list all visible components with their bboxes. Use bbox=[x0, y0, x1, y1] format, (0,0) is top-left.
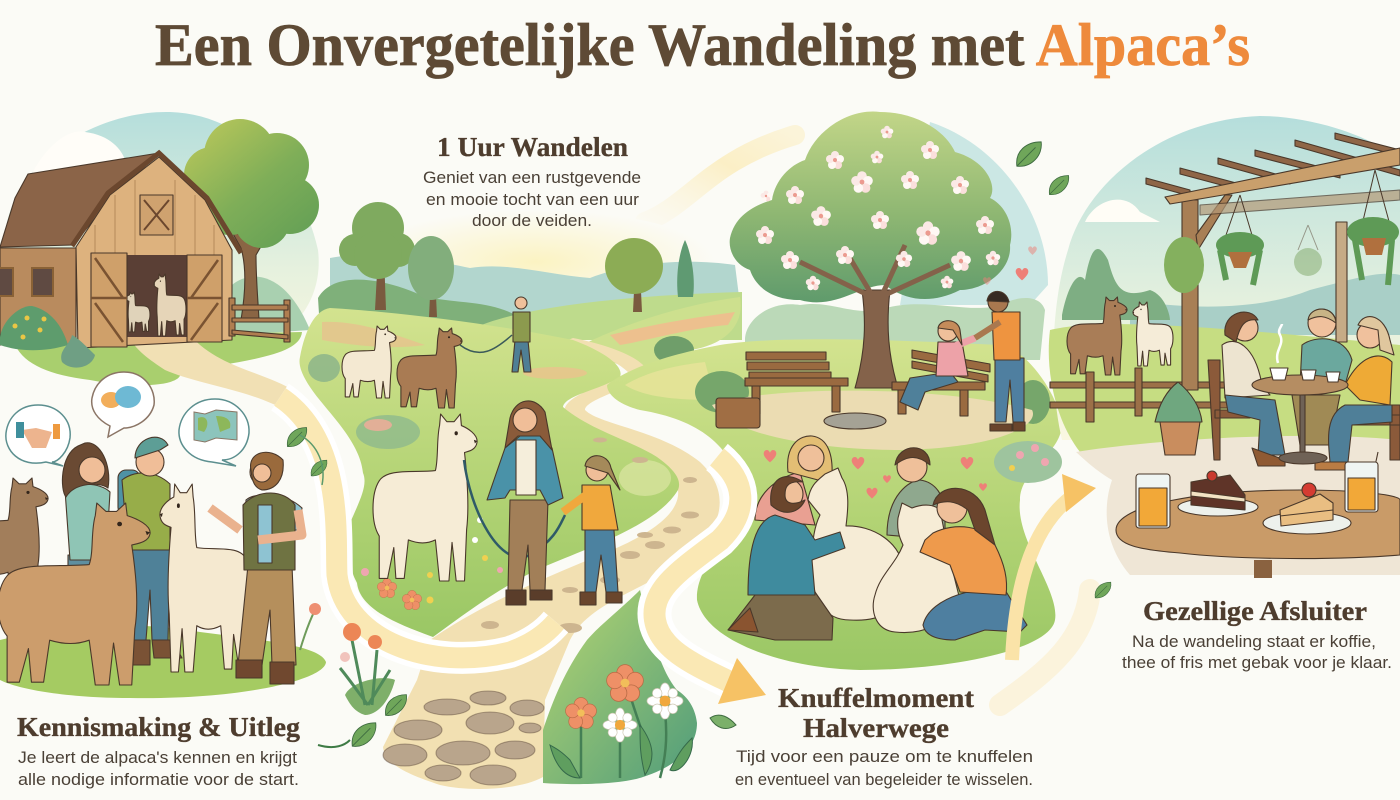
text: step 4: Na de wandeling staat er koffie, bbox=[1132, 632, 1376, 651]
guide with vest bbox=[210, 452, 302, 684]
back man head bbox=[897, 452, 927, 482]
woman head bbox=[937, 493, 967, 523]
speech bubble: handshake bbox=[6, 405, 70, 466]
sky tint bbox=[900, 122, 1048, 305]
heading: step 3: Halverwege bbox=[803, 713, 949, 743]
brown alpaca bbox=[0, 478, 48, 603]
cypress bbox=[677, 240, 694, 297]
hug grass bbox=[607, 339, 1062, 670]
text: step 2: door de veiden. bbox=[472, 211, 592, 230]
distant hills bbox=[1130, 274, 1400, 335]
man beard bbox=[771, 477, 805, 512]
leaf bbox=[1049, 175, 1069, 195]
patio bbox=[1076, 436, 1400, 575]
barn side roof bbox=[0, 153, 159, 247]
cafe table bbox=[1252, 375, 1348, 464]
man head bbox=[773, 479, 803, 509]
hugging group bbox=[728, 436, 1027, 640]
blossoms bbox=[756, 126, 1000, 290]
man boot bbox=[728, 608, 758, 632]
distant brown alpaca bbox=[397, 328, 462, 408]
man in green hoodie bbox=[118, 437, 182, 665]
route band to stone path bbox=[280, 397, 556, 658]
barn loft window bbox=[140, 195, 173, 235]
table leg bbox=[1254, 560, 1272, 578]
speech bubble: map bbox=[179, 399, 249, 466]
wooden fence bbox=[1050, 368, 1230, 422]
grass under barn bbox=[15, 332, 302, 385]
white flower plant bbox=[61, 335, 95, 368]
woman with backpack bbox=[62, 443, 110, 600]
lying alpaca bbox=[873, 503, 960, 633]
cups bbox=[1270, 368, 1340, 382]
field flowers bbox=[361, 517, 503, 610]
sun glow bbox=[355, 210, 715, 314]
heading: step 3 bbox=[778, 683, 974, 743]
couple at bench bbox=[900, 291, 1025, 431]
barn doors bbox=[91, 253, 222, 347]
green hills bbox=[318, 280, 530, 330]
tree behind barn bbox=[184, 119, 319, 320]
title: Een Onvergetelijke Wandeling met Alpaca’s bbox=[155, 12, 1250, 78]
child bbox=[563, 456, 622, 605]
main meadow bbox=[299, 308, 679, 637]
left bench bbox=[745, 352, 848, 414]
alpaca in barn bbox=[154, 274, 186, 336]
bush with yellow flowers bbox=[0, 306, 68, 350]
coffee steam bbox=[1277, 324, 1282, 363]
text: step 4: thee of fris met gebak voor je klaar. bbox=[1122, 653, 1392, 672]
heading: step 4: Gezellige Afsluiter bbox=[1143, 596, 1367, 626]
flower patches bbox=[308, 322, 671, 496]
man in teal bbox=[748, 515, 845, 595]
yellow flower strip bbox=[625, 362, 715, 400]
woman in orange bbox=[920, 527, 1007, 595]
right shrub bbox=[1016, 380, 1050, 424]
tan alpaca bbox=[0, 503, 150, 685]
stones along path bbox=[481, 438, 699, 649]
panel: barn scene bbox=[0, 112, 319, 410]
chocolate cake bbox=[1178, 471, 1258, 516]
climbing plant bbox=[1164, 237, 1204, 293]
heading: step 3: Knuffelmoment bbox=[778, 683, 974, 713]
seated woman bbox=[1208, 312, 1285, 466]
panel: meeting scene bbox=[0, 372, 326, 698]
barn sky bbox=[5, 112, 319, 374]
leaf bbox=[1017, 142, 1041, 166]
tall trees bbox=[1062, 249, 1170, 320]
tree trunk bbox=[855, 290, 898, 388]
cream alpaca bbox=[160, 484, 252, 672]
text: step 1: alle nodige informatie voor de start. bbox=[18, 770, 299, 789]
back man bbox=[887, 480, 945, 540]
hanging plant bbox=[1347, 170, 1399, 285]
meeting grass bbox=[0, 625, 326, 698]
small orange flowers bbox=[300, 603, 321, 650]
text: step 1: Je leert de alpaca's kennen en krijgt bbox=[18, 748, 297, 767]
hug hills bbox=[745, 298, 1045, 360]
text: step 3: Tijd voor een pauze om te knuffelen bbox=[736, 747, 1033, 766]
arrow: to terrace bbox=[1012, 474, 1096, 660]
seated woman blonde bbox=[1315, 317, 1400, 470]
hanging plant bbox=[1216, 195, 1264, 285]
flower bush bbox=[994, 441, 1062, 483]
cobblestones bbox=[383, 691, 544, 785]
distant cream alpaca bbox=[342, 326, 396, 398]
terrace sky bbox=[1053, 116, 1400, 440]
woman legs bbox=[923, 589, 1027, 640]
barn gable trim bbox=[72, 153, 241, 253]
text: step 4 bbox=[1122, 632, 1392, 672]
back meadow bbox=[572, 297, 741, 373]
panel: hug scene bbox=[607, 112, 1062, 670]
woman hair bbox=[933, 488, 995, 545]
big cream alpaca bbox=[373, 414, 477, 581]
leaf bbox=[1095, 582, 1111, 598]
flower strip bbox=[610, 312, 735, 345]
blossom crown bbox=[730, 112, 1011, 302]
heading: step 1: Kennismaking & Uitleg bbox=[17, 712, 301, 742]
text: step 1 bbox=[18, 748, 299, 789]
seated man bbox=[1292, 309, 1352, 445]
pale route sweeps bbox=[645, 135, 1090, 705]
cloud bbox=[30, 131, 125, 178]
tree bbox=[339, 202, 415, 310]
cream alpaca bbox=[1133, 302, 1173, 366]
hanging plant faded bbox=[1294, 225, 1322, 276]
rolling fields bbox=[470, 292, 742, 340]
barn door opening bbox=[127, 255, 187, 337]
fluffy alpaca bbox=[808, 468, 905, 620]
falling hearts bbox=[764, 246, 1037, 499]
woman leading bbox=[487, 401, 563, 605]
heading: step 2: 1 Uur Wandelen bbox=[437, 132, 628, 162]
terrace meadow bbox=[1049, 324, 1400, 452]
flower bbox=[566, 698, 596, 728]
text: step 2 bbox=[423, 168, 641, 230]
brown alpaca bbox=[1067, 297, 1127, 375]
shrub bbox=[654, 336, 694, 364]
cloud bbox=[1085, 200, 1160, 222]
right bench bbox=[892, 350, 990, 416]
lead rope bbox=[464, 460, 565, 557]
text: step 3 bbox=[735, 747, 1033, 789]
woman behind bbox=[755, 472, 815, 525]
woman behind head bbox=[788, 436, 832, 480]
arrow: to hug stop bbox=[654, 457, 766, 704]
tree bbox=[605, 238, 663, 312]
barn side wall bbox=[0, 248, 76, 345]
leaf with stem bbox=[318, 723, 376, 747]
left shrub bbox=[695, 371, 749, 413]
leaf bbox=[385, 695, 407, 716]
small alpaca in barn bbox=[126, 292, 150, 332]
rocks bbox=[824, 413, 886, 429]
back man hair bbox=[895, 448, 930, 465]
meadow with flowers bbox=[543, 590, 697, 784]
flower bbox=[603, 708, 637, 742]
panel: terrace scene bbox=[1049, 116, 1400, 578]
leaf bbox=[710, 715, 736, 729]
barn front wall bbox=[76, 157, 232, 348]
pergola bbox=[1146, 133, 1400, 390]
panel: walking scene bbox=[299, 202, 742, 789]
text: step 3: en eventueel van begeleider te wisselen. bbox=[735, 770, 1033, 789]
fence bbox=[229, 298, 290, 342]
tree bbox=[408, 236, 454, 317]
flower bbox=[607, 665, 643, 701]
distant walker bbox=[460, 297, 531, 372]
man legs bbox=[728, 592, 833, 640]
text: step 2: en mooie tocht van een uur bbox=[426, 190, 639, 209]
tulip cluster bbox=[340, 623, 395, 715]
juice glass with straw bbox=[1345, 452, 1378, 512]
vanilla cake bbox=[1263, 483, 1351, 534]
text: step 2: Geniet van een rustgevende bbox=[423, 168, 641, 187]
speech bubble: chat bbox=[92, 372, 154, 437]
barn side window bbox=[0, 268, 53, 296]
flower bbox=[647, 683, 683, 719]
treasure chest bbox=[716, 398, 760, 428]
potted plant bbox=[1155, 382, 1202, 455]
soft bushes bbox=[232, 277, 310, 335]
sand patch bbox=[712, 391, 1033, 450]
branches bbox=[800, 245, 950, 295]
barn planks bbox=[95, 180, 214, 255]
winding sand path bbox=[383, 338, 720, 789]
foreground table bbox=[1116, 490, 1400, 559]
sand path from barn bbox=[128, 335, 300, 410]
leaf sprig bbox=[287, 427, 327, 485]
juice glass bbox=[1136, 474, 1170, 528]
blossom tree bbox=[730, 112, 1011, 388]
distant hills bbox=[330, 254, 742, 320]
